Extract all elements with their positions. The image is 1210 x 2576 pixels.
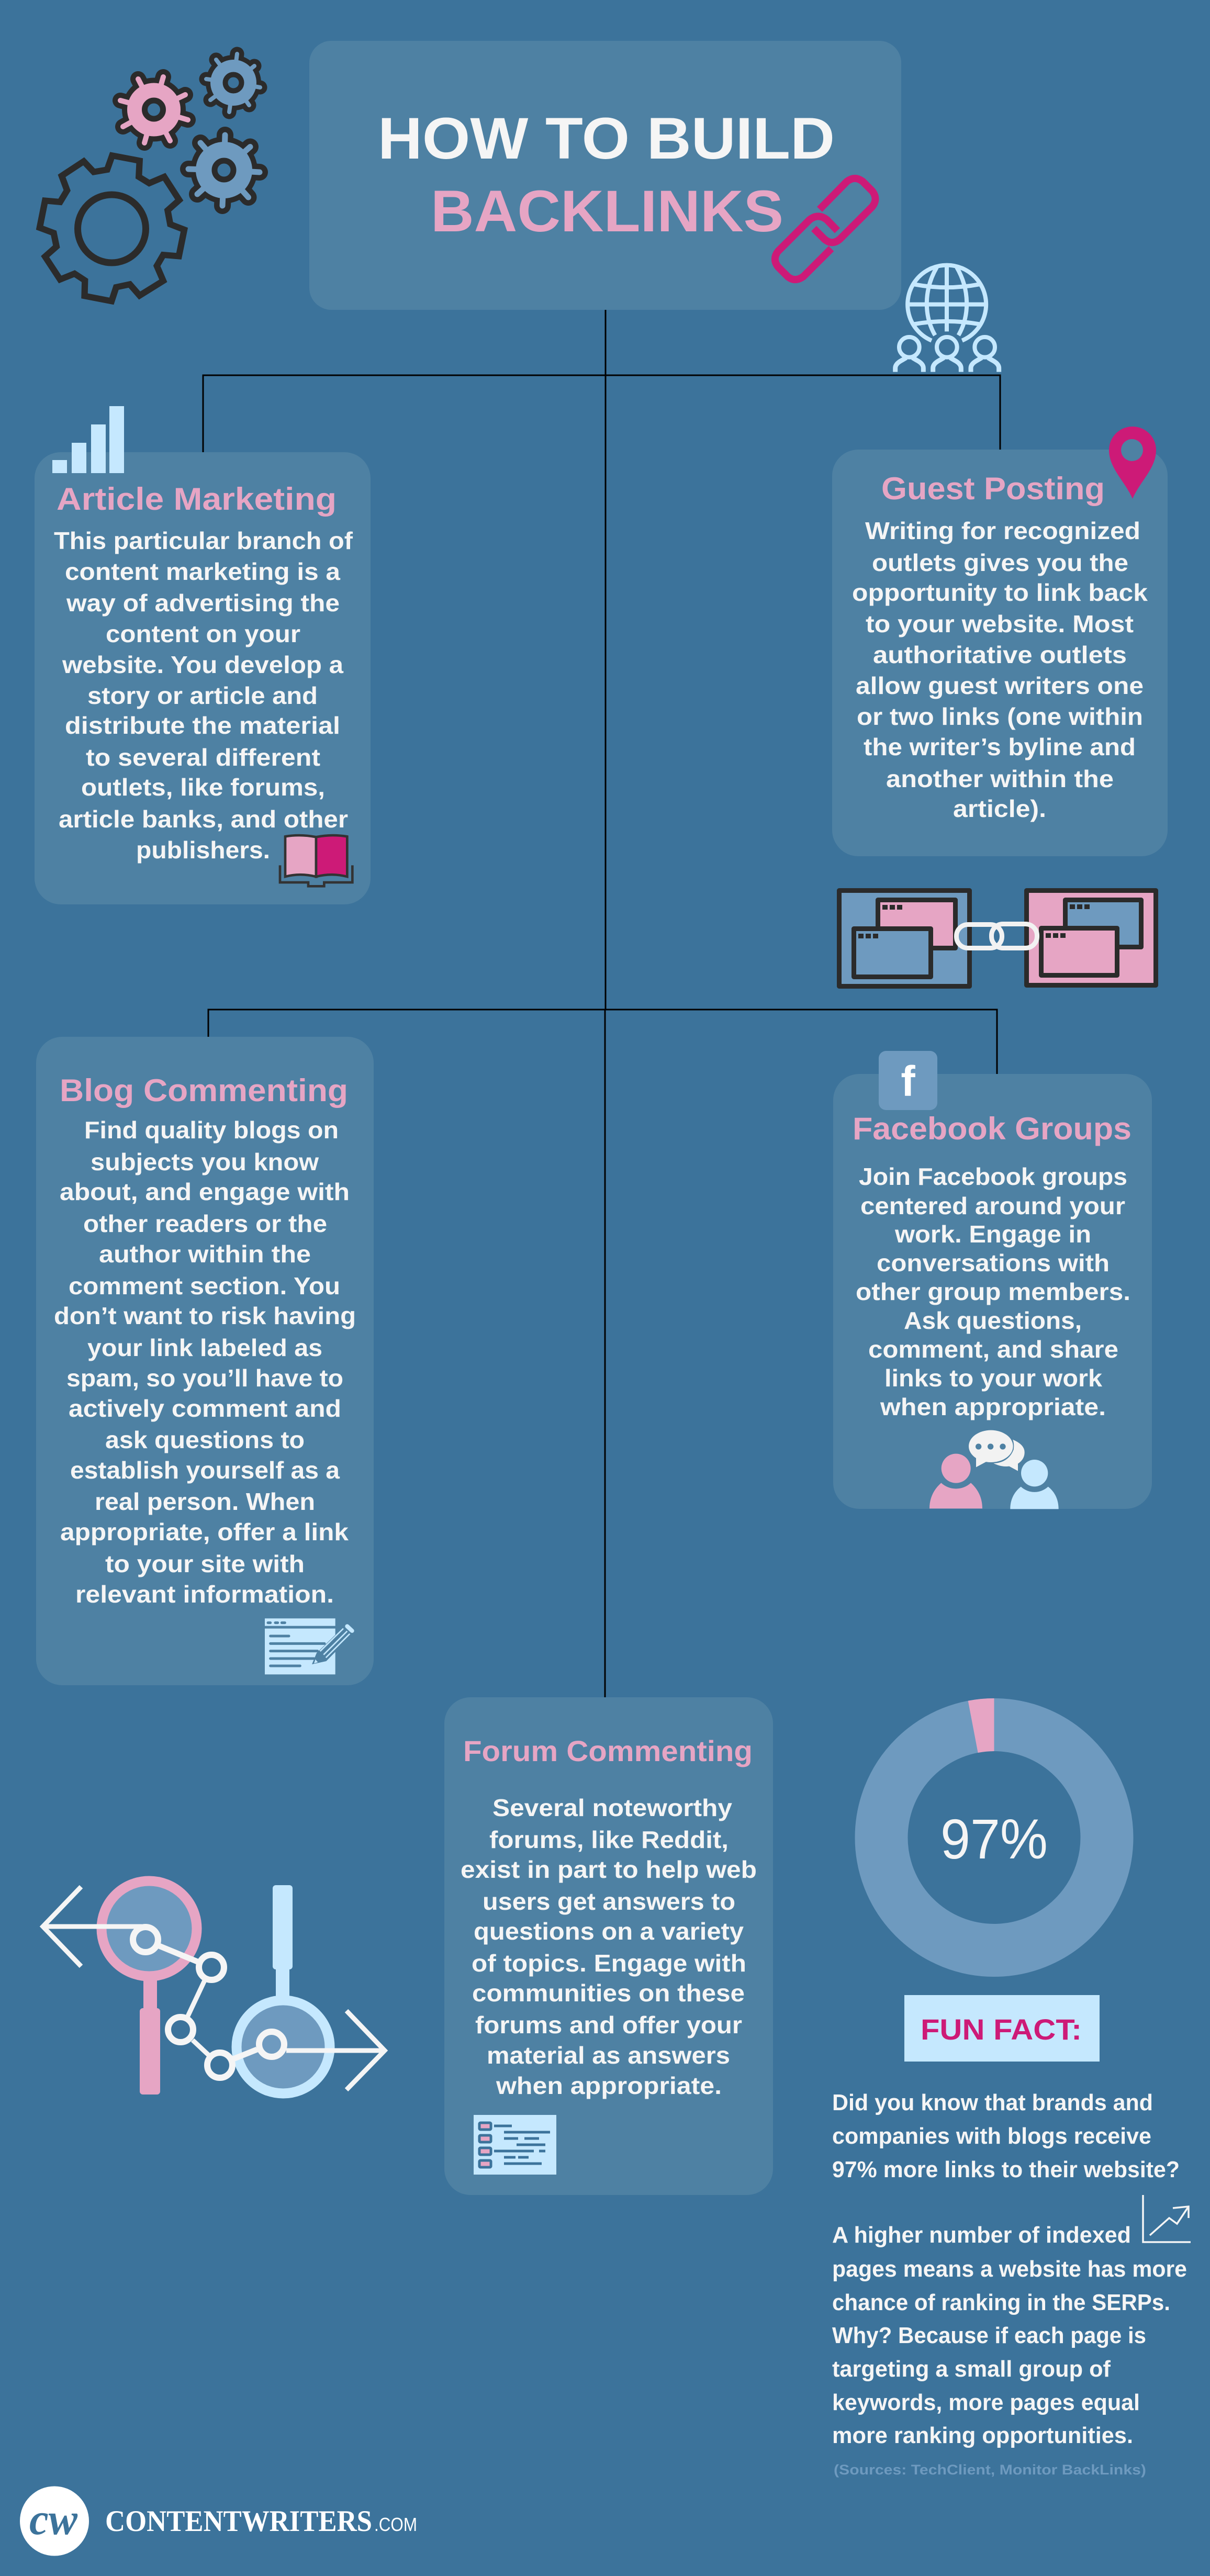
blog body text: real person. When (95, 1488, 315, 1515)
guest body text: article). (953, 795, 1046, 822)
text block: fun fact: 97% more links to their website? (832, 2157, 1180, 2182)
article body text: This particular branch of (54, 527, 353, 554)
link path nodes (133, 1927, 284, 2078)
panel: article marketing (35, 406, 371, 904)
forum heading: Forum Commenting (463, 1734, 753, 1767)
text block: fun fact: Why? Because if each page is (832, 2323, 1146, 2348)
facebook body text: conversations with (877, 1249, 1110, 1276)
forum body text: questions on a variety (474, 1918, 744, 1945)
icon: people chatting (929, 1430, 1059, 1509)
forum body text: Several noteworthy (492, 1794, 732, 1821)
guest panel background (832, 450, 1168, 856)
title (378, 106, 835, 244)
guest body text: another within the (886, 765, 1114, 792)
large outline gear (40, 155, 184, 301)
forum body text: forums, like Reddit, (489, 1826, 729, 1853)
guest body text: outlets gives you the (872, 549, 1128, 576)
guest body text: or two links (one within (857, 703, 1143, 730)
text block: fun fact: chance of ranking in the SERPs. (832, 2290, 1170, 2315)
guest heading: Guest Posting (881, 471, 1105, 506)
icon: open book (280, 835, 352, 886)
blog body text (54, 1116, 356, 1608)
forum body text: forums and offer your (475, 2011, 742, 2039)
article body text: article banks, and other (59, 805, 348, 833)
icon: globe and people (895, 265, 999, 372)
forum body text: material as answers (487, 2042, 730, 2069)
panel: title (309, 41, 901, 310)
blog body text: other readers or the (83, 1210, 327, 1237)
text block: fun fact: keywords, more pages equal (832, 2390, 1140, 2415)
facebook body text: when appropriate. (880, 1393, 1106, 1420)
forum body text: users get answers to (483, 1888, 735, 1915)
icon: gears (40, 54, 261, 301)
logo wordmark: CONTENTWRITERS (105, 2505, 372, 2538)
icon: bar chart (52, 406, 124, 473)
article heading: Article Marketing (57, 481, 337, 517)
blog body text: comment section. You (69, 1272, 340, 1300)
text block: fun fact (832, 2090, 1187, 2448)
guest body text: authoritative outlets (873, 641, 1127, 668)
facebook body text: other group members. (856, 1278, 1130, 1305)
article panel background (35, 452, 371, 904)
connector lines (203, 310, 1000, 1697)
forum body text: when appropriate. (496, 2072, 722, 2099)
icon: chain link (775, 178, 875, 279)
logo: contentwriters.com (20, 2486, 417, 2556)
blog body text: about, and engage with (60, 1178, 350, 1205)
article body text: story or article and (87, 682, 318, 709)
blog heading: Blog Commenting (60, 1073, 348, 1108)
title: HOW TO BUILD (378, 106, 835, 171)
icon: forum thread list (474, 2115, 556, 2175)
forum body text: of topics. Engage with (472, 1950, 746, 1977)
title panel background (309, 41, 901, 310)
blue gear top (206, 54, 261, 112)
facebook panel background (833, 1074, 1152, 1509)
article body text: outlets, like forums, (81, 774, 325, 801)
article body text: way of advertising the (66, 589, 340, 617)
article body text: publishers. (136, 836, 270, 864)
callout: fun fact label (904, 1995, 1100, 2062)
panel: guest posting (832, 427, 1168, 856)
logo badge (20, 2486, 89, 2556)
icon: trend chart (1143, 2195, 1191, 2242)
blog body text: actively comment and (69, 1395, 341, 1422)
facebook body text: Ask questions, (904, 1307, 1082, 1334)
article body text: distribute the material (65, 712, 340, 739)
guest body text: to your website. Most (866, 610, 1134, 637)
text block: fun fact: more ranking opportunities. (832, 2423, 1133, 2448)
facebook body text: Join Facebook groups (859, 1163, 1127, 1190)
facebook body text (856, 1163, 1130, 1420)
logo suffix: .COM (374, 2514, 417, 2535)
blog body text: ask questions to (105, 1426, 305, 1453)
icon: linked browser windows (839, 891, 1156, 986)
article body text: content on your (106, 620, 300, 647)
panel: forum commenting (444, 1697, 773, 2195)
article body text (54, 527, 353, 864)
guest body text: allow guest writers one (856, 672, 1144, 699)
forum panel background (444, 1697, 773, 2195)
panel: blog commenting (36, 1037, 374, 1685)
panel: facebook groups (833, 1051, 1152, 1509)
blog body text: establish yourself as a (70, 1457, 340, 1484)
article body text: content marketing is a (65, 558, 340, 585)
blue magnifier (237, 1885, 330, 2093)
text block: fun fact: pages means a website has more (832, 2256, 1187, 2282)
sources note: (Sources: TechClient, Monitor BackLinks) (834, 2462, 1146, 2478)
icon: facebook: f (901, 1058, 915, 1105)
blog body text: subjects you know (91, 1148, 319, 1175)
blog body text: relevant information. (75, 1581, 334, 1608)
article body text: website. You develop a (62, 651, 343, 678)
blog body text: your link labeled as (87, 1334, 322, 1361)
title: BACKLINKS (431, 178, 783, 244)
blog body text: Find quality blogs on (84, 1116, 339, 1144)
facebook body text: centered around your (860, 1192, 1125, 1219)
guest body text: the writer’s byline and (864, 733, 1136, 760)
logo initials: cw (29, 2494, 78, 2544)
facebook heading: Facebook Groups (853, 1111, 1131, 1146)
facebook body text: comment, and share (868, 1336, 1118, 1363)
donut chart: 97% (881, 1698, 1107, 1950)
pink magnifier (102, 1881, 197, 2095)
right arrow (286, 2011, 385, 2090)
icon: magnifiers with link path (43, 1881, 385, 2095)
icon: map pin (1109, 427, 1156, 499)
blog body text: to your site with (105, 1550, 305, 1577)
blog panel background (36, 1037, 374, 1685)
text block: fun fact: companies with blogs receive (832, 2123, 1151, 2149)
blog body text: don’t want to risk having (54, 1302, 356, 1329)
large gear hub (77, 195, 145, 263)
facebook body text: work. Engage in (894, 1220, 1091, 1248)
text block: fun fact: Did you know that brands and (832, 2090, 1153, 2115)
forum body text: communities on these (472, 1979, 745, 2007)
icon: document and pencil (265, 1618, 353, 1674)
text block: fun fact: targeting a small group of (832, 2356, 1111, 2382)
guest body text (852, 517, 1148, 822)
blog body text: appropriate, offer a link (60, 1518, 349, 1545)
article body text: to several different (86, 744, 320, 771)
blog body text: spam, so you’ll have to (66, 1364, 343, 1392)
icon: facebook (879, 1051, 937, 1110)
pink gear (120, 77, 188, 143)
guest body text: opportunity to link back (852, 579, 1148, 606)
forum body text: exist in part to help web (461, 1856, 757, 1883)
blog body text: author within the (99, 1240, 311, 1268)
left arrow (43, 1887, 142, 1966)
blue gear bottom (188, 135, 260, 206)
callout: fun fact label: FUN FACT: (921, 2013, 1082, 2046)
forum body text (461, 1794, 757, 2099)
donut chart: 97%: 97% (940, 1807, 1048, 1871)
facebook body text: links to your work (884, 1364, 1102, 1392)
text block: fun fact: A higher number of indexed (832, 2222, 1131, 2248)
guest body text: Writing for recognized (865, 517, 1140, 544)
